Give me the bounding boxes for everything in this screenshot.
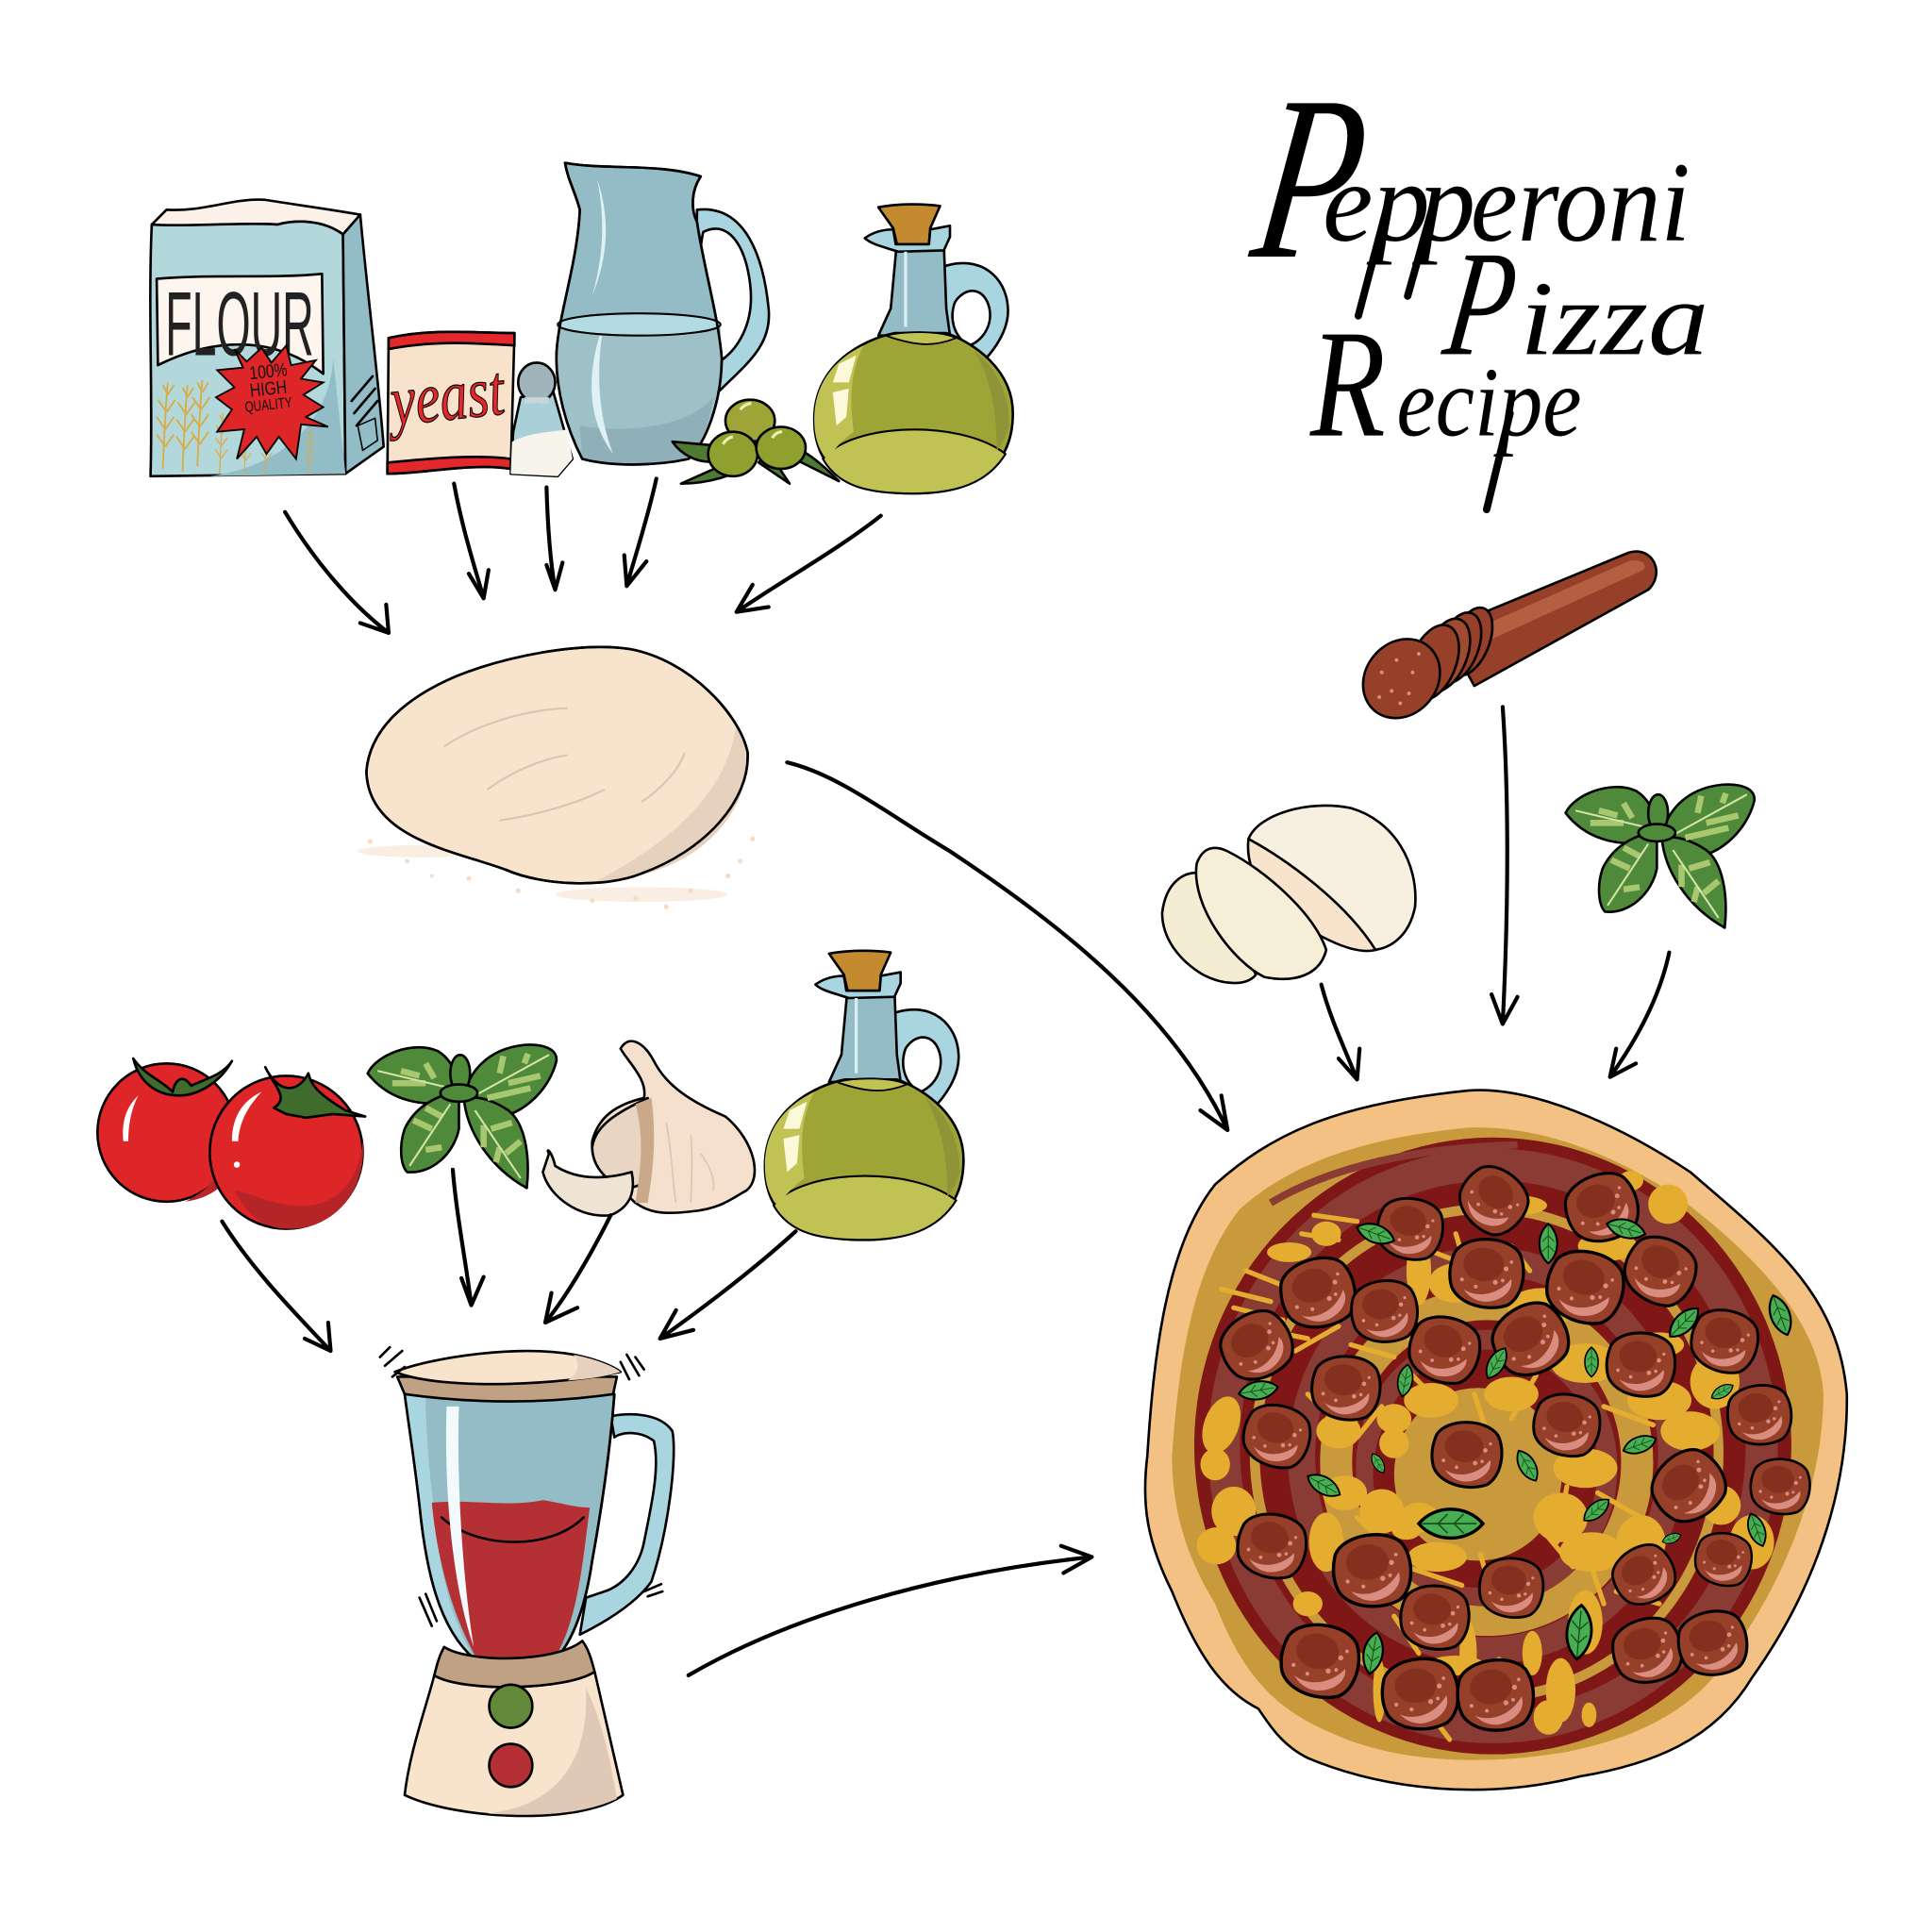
tomato sauce (432, 1500, 590, 1659)
title: e (1323, 141, 1373, 266)
title: p (1411, 141, 1475, 266)
vibration marks (380, 1347, 662, 1626)
dough ball (358, 647, 755, 909)
icon: mozzarella (1162, 806, 1415, 983)
title: ecipe (1396, 348, 1582, 458)
quality starburst: HIGH (249, 376, 288, 401)
title: eroni (1471, 141, 1690, 266)
buttons (490, 1685, 532, 1728)
icon: yeast packet (382, 332, 514, 474)
title: p (1366, 141, 1430, 266)
yeast label text: yeast (382, 351, 509, 441)
flour label text: FLOUR (165, 274, 314, 375)
icon: olive oil bottle, sauce (765, 951, 963, 1240)
arrow: sauce to pizza (689, 1546, 1091, 1675)
quality starburst: 100% (248, 358, 289, 384)
cheese shreds (1222, 1215, 1659, 1740)
blender handle (580, 1414, 674, 1635)
melted cheese (1195, 1171, 1774, 1735)
quality starburst: QUALITY (244, 393, 292, 415)
arrows: sauce ingredients to blender (222, 1170, 796, 1351)
icon: garlic (542, 1041, 755, 1216)
icon: basil, sauce (368, 1045, 557, 1188)
icon: salt shaker (510, 362, 573, 476)
icon: pepperoni sausage (1347, 552, 1657, 734)
icon: water jug (557, 163, 769, 464)
sauce layers (1172, 1127, 1824, 1760)
arrows: ingredients to dough (285, 478, 881, 633)
title: P (1436, 221, 1526, 388)
quality starburst (216, 345, 328, 458)
icon: basil, topping (1566, 785, 1755, 927)
blender jar (405, 1394, 614, 1659)
icon: olives (673, 400, 839, 484)
title: R (1309, 299, 1386, 470)
base (405, 1672, 623, 1816)
arrows: toppings to pizza (1322, 707, 1669, 1079)
pepperoni slices (1210, 1155, 1812, 1734)
title (1240, 49, 1708, 509)
arrow: dough to pizza (787, 762, 1227, 1130)
icon: flour bag (150, 200, 384, 476)
icon: tomatoes (97, 1058, 365, 1229)
basil leaves on pizza (1238, 1215, 1796, 1675)
crust (1145, 1091, 1847, 1790)
title: P (1240, 49, 1381, 308)
lid (397, 1376, 617, 1402)
finished pizza (1145, 1091, 1847, 1790)
icon: olive oil bottle (814, 205, 1013, 493)
icon: blender (380, 1347, 674, 1816)
title: izza (1520, 260, 1708, 377)
